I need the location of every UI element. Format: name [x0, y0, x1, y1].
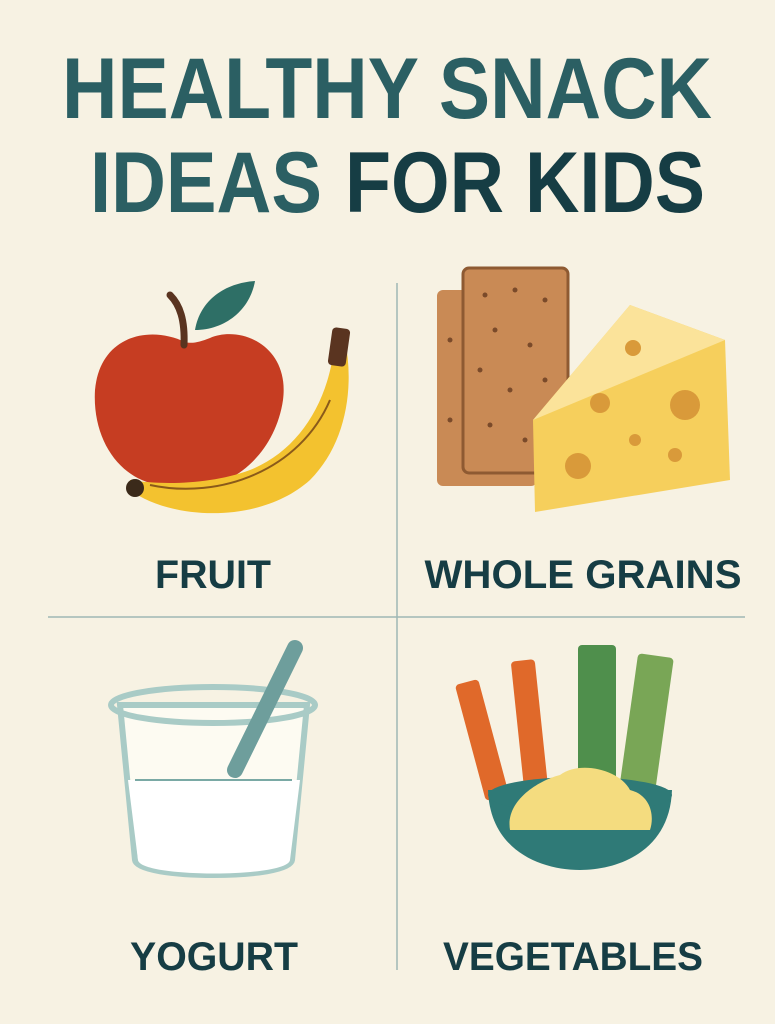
label: fruit: FRUIT [155, 553, 271, 597]
panel: fruit [95, 281, 351, 597]
icon: crackers [437, 268, 568, 486]
label: yogurt: YOGURT [130, 935, 298, 979]
panel: whole grains [424, 268, 742, 597]
icon: apple [95, 281, 284, 485]
panel: yogurt [111, 648, 315, 979]
title: FOR KIDS [345, 135, 705, 231]
title: IDEAS [90, 135, 322, 231]
icon: cheese [533, 305, 730, 512]
icon: yogurt cup [111, 648, 315, 875]
label: whole grains: WHOLE GRAINS [424, 553, 742, 597]
icon: banana [126, 327, 351, 513]
title: HEALTHY SNACK [62, 41, 712, 137]
icon: veggie sticks and dip [455, 645, 674, 870]
panel: vegetables [443, 645, 703, 979]
title [62, 41, 712, 231]
label: vegetables: VEGETABLES [443, 935, 703, 979]
